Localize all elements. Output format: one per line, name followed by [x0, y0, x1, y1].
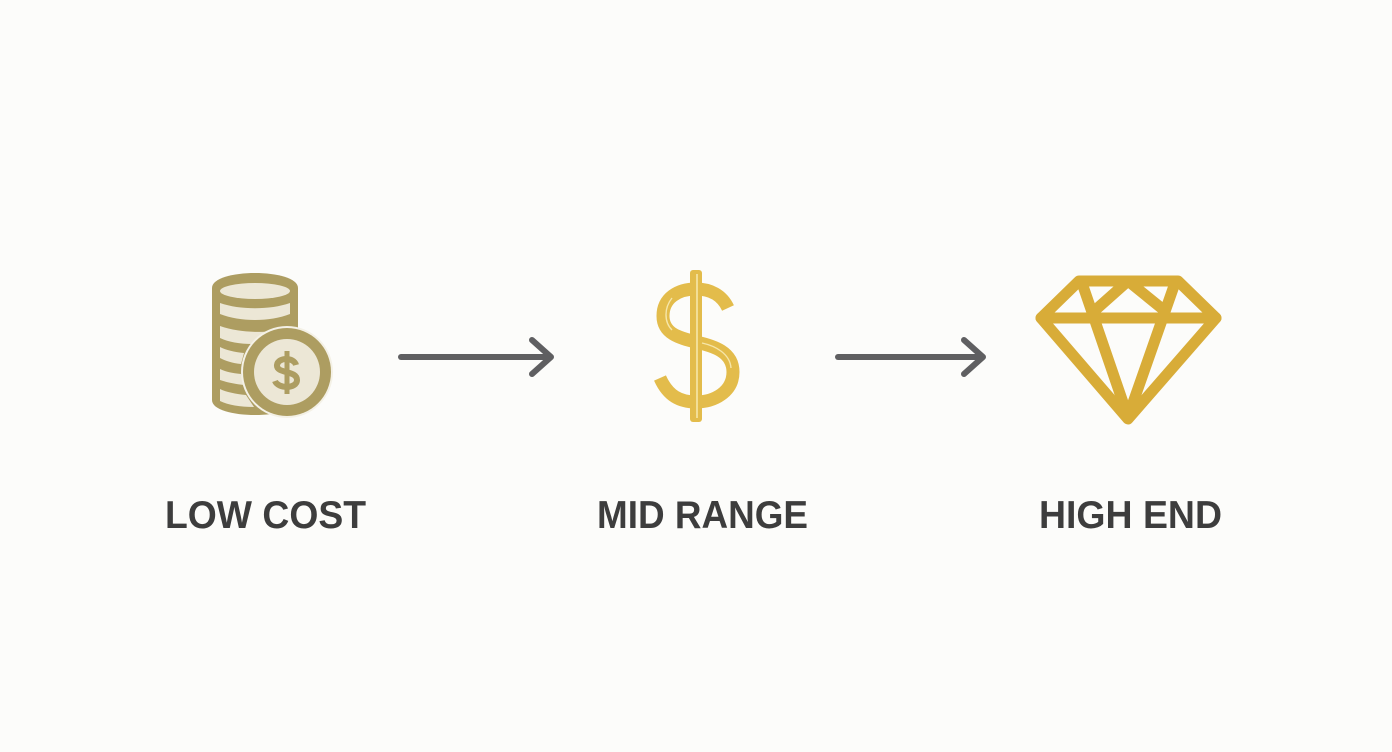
icon: diamond: [1041, 281, 1216, 419]
icon: dollar sign: [660, 270, 733, 422]
icon: coin stack: [212, 273, 333, 418]
coin dollar sign: [275, 351, 297, 394]
label: high end: HIGH END: [1039, 494, 1222, 537]
label: mid range: MID RANGE: [597, 494, 808, 537]
label: low cost: LOW COST: [165, 494, 366, 537]
dollar highlights: [696, 274, 698, 418]
arrow: low to mid: [401, 340, 551, 374]
arrow: mid to high: [838, 340, 983, 374]
